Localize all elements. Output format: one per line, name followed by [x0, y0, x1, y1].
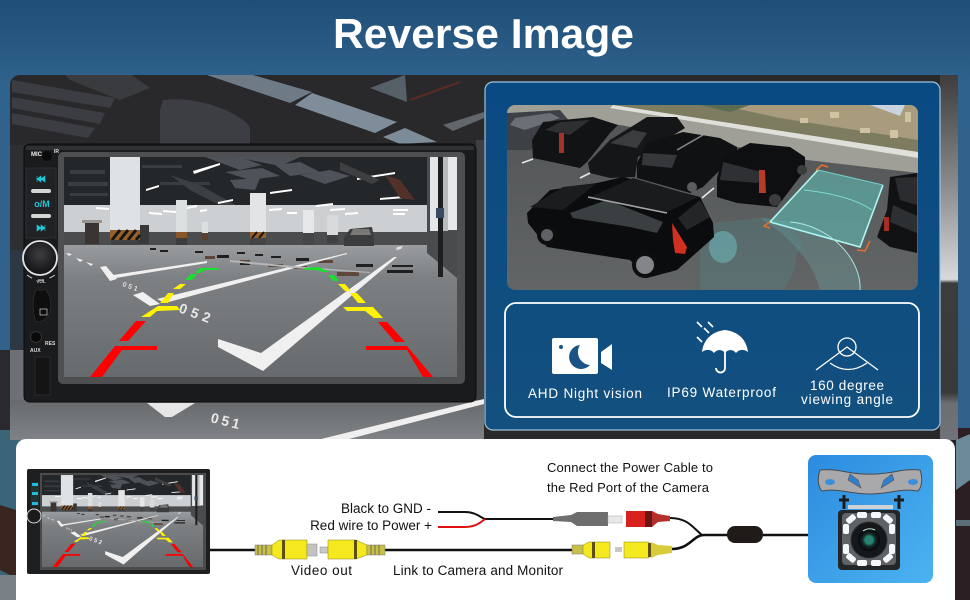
- panel: features: [485, 82, 940, 430]
- small head unit: [27, 469, 210, 574]
- camera body: [838, 510, 900, 570]
- label: link: Link to Camera and Monitor: [393, 563, 564, 578]
- camera tile: [808, 455, 933, 583]
- title: Reverse Image: [333, 10, 634, 57]
- right car: [877, 173, 917, 253]
- label: IP69 Waterproof: IP69 Waterproof: [667, 385, 776, 400]
- city: [613, 105, 918, 155]
- control strip: RES: [45, 341, 56, 347]
- garage background photo: 051: [209, 409, 245, 433]
- panel: wiring diagram: the Red Port of the Camera: [547, 480, 710, 495]
- photo: parking assist: [507, 105, 918, 290]
- garage background photo: [10, 75, 958, 440]
- parked cars: [507, 110, 570, 150]
- feature box: viewing angle: [801, 392, 893, 407]
- label: AHD Night vision: AHD Night vision: [528, 386, 642, 401]
- label: black wire: Black to GND -: [341, 501, 431, 516]
- label: video out: Video out: [291, 563, 352, 578]
- label: red wire: Red wire to Power +: [310, 518, 432, 533]
- video connectors: [255, 540, 672, 559]
- wall: [507, 105, 918, 173]
- screen bezel: [58, 152, 465, 384]
- label: connect: Connect the Power Cable to: [547, 460, 713, 475]
- feature box: [505, 303, 919, 417]
- control strip: MIC: [31, 152, 43, 158]
- screen scene: [64, 157, 457, 377]
- control strip: o/M: [34, 199, 50, 209]
- parking marks: [522, 159, 714, 198]
- control strip: [23, 149, 59, 395]
- icon: viewing angle: [816, 338, 878, 370]
- main car: [527, 177, 714, 278]
- icon: night vision camera: [552, 338, 612, 374]
- sensor field: [760, 218, 860, 290]
- stems: [839, 495, 904, 509]
- head unit: [23, 144, 476, 402]
- power wires: [438, 512, 702, 535]
- icon: umbrella: [697, 322, 748, 372]
- control strip: IR: [54, 149, 59, 155]
- video cable: [210, 535, 808, 550]
- bracket: [818, 470, 922, 494]
- control strip: VOL: [36, 279, 46, 284]
- inline filter: [727, 526, 763, 543]
- control strip: AUX: [30, 348, 41, 354]
- power connectors: [553, 511, 670, 527]
- panel: wiring diagram: [16, 439, 955, 600]
- label: 160 degree viewing angle: 160 degree: [810, 378, 884, 393]
- floor: [10, 400, 484, 440]
